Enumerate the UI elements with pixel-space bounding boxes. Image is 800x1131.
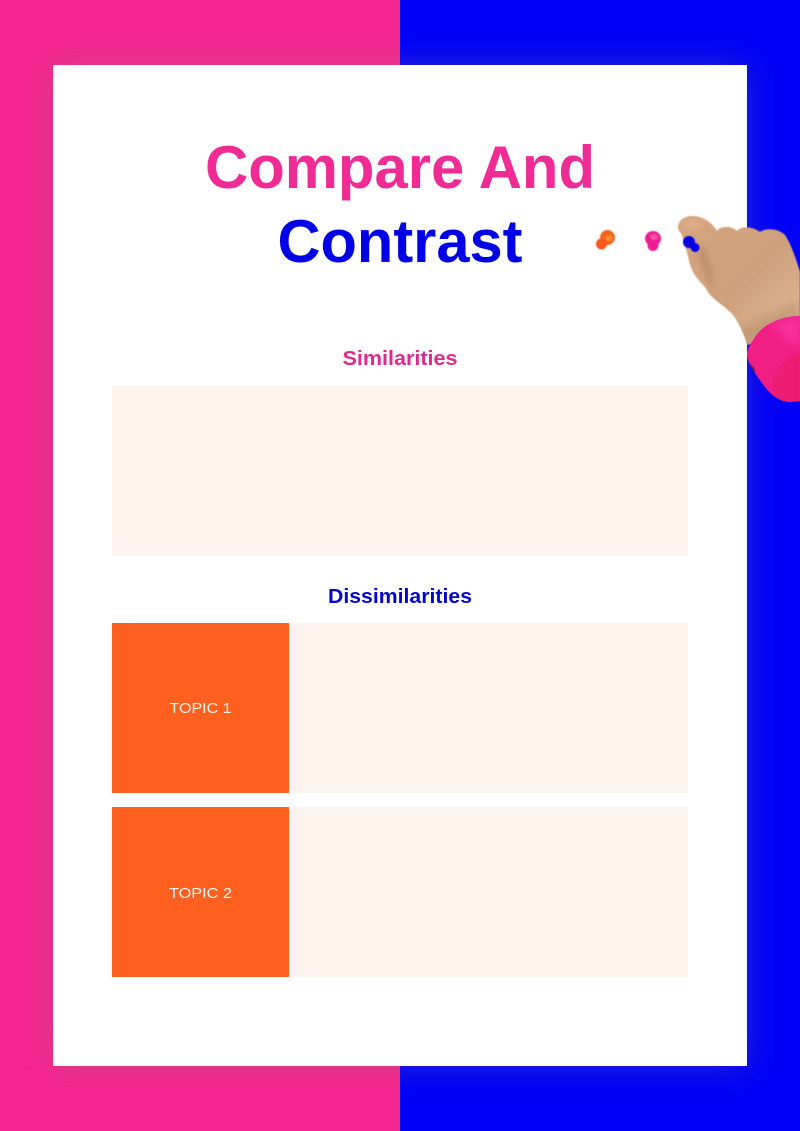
fingertip highlight bbox=[689, 222, 696, 226]
topic 2 label block bbox=[112, 807, 289, 977]
thumb crease shadow bbox=[698, 246, 713, 284]
panel: topic 1 row bbox=[112, 623, 688, 793]
icon: blue pin bbox=[683, 236, 700, 252]
title line 1: Compare And bbox=[205, 134, 595, 201]
topic 2 label: TOPIC 2 bbox=[169, 885, 232, 902]
hand shading bbox=[689, 222, 800, 345]
background: blue half bbox=[400, 0, 800, 1131]
cuff light band bbox=[774, 317, 800, 344]
hand bbox=[678, 216, 800, 345]
topic 1 content box bbox=[289, 623, 688, 793]
panel: similarities box bbox=[112, 386, 688, 556]
title line 2: Contrast bbox=[278, 208, 523, 275]
topic 2 content box bbox=[289, 807, 688, 977]
card glow bbox=[53, 65, 747, 1066]
heading: dissimilarities: Dissimilarities bbox=[328, 586, 472, 608]
cuff dark lower part bbox=[772, 354, 800, 402]
topic 1 label: TOPIC 1 bbox=[170, 700, 232, 717]
sleeve cuff bbox=[747, 316, 800, 402]
icon: orange pin bbox=[596, 230, 615, 250]
heading: similarities: Similarities bbox=[342, 348, 458, 370]
panel: white page bbox=[53, 65, 747, 1066]
illustration: hand holding blue pin bbox=[678, 216, 800, 410]
topic 1 label block bbox=[112, 623, 289, 793]
cuff base bbox=[747, 316, 800, 402]
wrist shadow bbox=[739, 300, 800, 345]
cuff edge shadow bbox=[750, 364, 756, 374]
icon: pink pin bbox=[645, 231, 661, 251]
title bbox=[205, 134, 595, 275]
panel: topic 2 row bbox=[112, 807, 688, 977]
background: pink half bbox=[0, 0, 400, 1131]
